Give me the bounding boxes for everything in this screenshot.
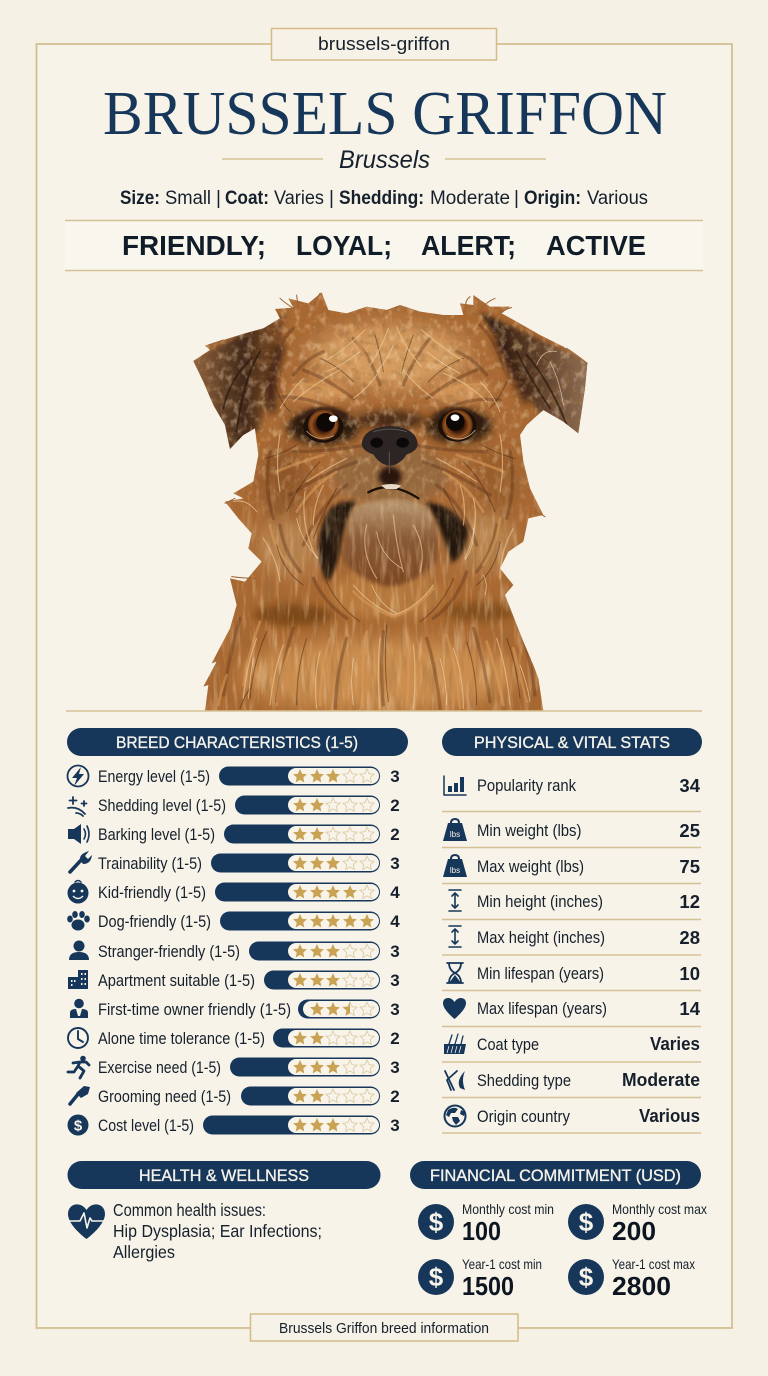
row: popularity rank: [442, 775, 701, 812]
fur strokes dark thin: [240, 335, 520, 708]
row: min lifespan: Min lifespan (years): [477, 965, 604, 983]
heading: financial commitment: FINANCIAL COMMITMENT (USD): [430, 1167, 681, 1185]
soft tones: [310, 325, 470, 388]
row: exercise need: [68, 1056, 400, 1078]
panel: physical and vital stats: [442, 728, 702, 1133]
head base: [252, 308, 528, 593]
icon: buildings: [68, 970, 88, 989]
stat: monthly cost min: [418, 1201, 554, 1246]
row: grooming need: Grooming need (1-5): [98, 1088, 231, 1106]
icon: brush: [70, 1086, 90, 1104]
row: stranger-friendly: Stranger-friendly (1-5): [98, 943, 240, 961]
row: cost level: 3: [390, 1116, 400, 1135]
stat: monthly cost max: $: [579, 1207, 594, 1237]
row: max lifespan: 14: [679, 998, 701, 1019]
row: trainability: Trainability (1-5): [98, 855, 202, 873]
row: grooming need: 2: [390, 1087, 400, 1106]
panel: breed characteristics: [67, 728, 408, 1136]
stat: year-1 cost max: 2800: [612, 1271, 671, 1301]
icon: weight: lbs: [450, 866, 460, 875]
text: common health issues: Hip Dysplasia; Ear Infections;: [113, 1221, 322, 1241]
icon: owner with tie: [70, 999, 88, 1018]
text: common health issues: [113, 1200, 322, 1262]
row: energy level: Energy level (1-5): [98, 768, 210, 786]
top tag: [272, 28, 496, 60]
row: max height: [442, 926, 701, 955]
row: min weight: 25: [679, 820, 700, 841]
meta line: Small: [165, 188, 211, 209]
row: coat type: [442, 1033, 701, 1062]
top tag: brussels-griffon: [318, 33, 450, 54]
nose and mouth: [362, 426, 418, 498]
heading: physical and vital stats: PHYSICAL & VITAL STATS: [474, 734, 670, 752]
icon: height arrows: [449, 890, 461, 911]
text: common health issues: Allergies: [113, 1242, 175, 1262]
icon: heart with pulse: [68, 1204, 105, 1239]
heading: health and wellness: [68, 1161, 380, 1189]
row: kid-friendly: Kid-friendly (1-5): [98, 884, 206, 902]
stat: year-1 cost min: $: [429, 1262, 444, 1292]
meta line: Moderate: [430, 188, 510, 209]
footer tag: [250, 1314, 518, 1341]
row: max weight: Max weight (lbs): [477, 858, 584, 876]
heading: financial commitment: [410, 1161, 701, 1189]
row: kid-friendly: [68, 880, 400, 904]
row: min weight: Min weight (lbs): [477, 822, 582, 840]
row: stranger-friendly: [69, 940, 400, 961]
dog portrait illustration: [180, 285, 600, 712]
row: alone time tolerance: 2: [390, 1029, 400, 1048]
edge spikes: [208, 293, 587, 578]
row: coat type: Coat type: [477, 1036, 539, 1054]
row: popularity rank: 34: [679, 775, 701, 796]
stat: year-1 cost max: Year-1 cost max: [612, 1256, 695, 1272]
row: min weight: [442, 819, 701, 848]
panel: health and wellness: [68, 1161, 380, 1262]
row: max height: 28: [679, 927, 700, 948]
row: cost level: Cost level (1-5): [98, 1117, 194, 1135]
meta line: |: [216, 188, 221, 209]
row: max weight: [442, 855, 701, 884]
row: trainability: 3: [390, 854, 400, 873]
fur streak overlay lower: [206, 477, 543, 710]
fur strokes golden: [218, 322, 527, 708]
meta line: |: [329, 188, 334, 209]
row: stranger-friendly: 3: [390, 942, 400, 961]
row: shedding level: 2: [390, 796, 400, 815]
icon: heart: [443, 998, 466, 1019]
row: min lifespan: 10: [679, 963, 700, 984]
stat: year-1 cost min: [418, 1256, 542, 1301]
icon: shedding hair: [445, 1071, 465, 1090]
icon: clock: [68, 1028, 88, 1048]
stat: year-1 cost max: $: [579, 1262, 594, 1292]
row: min lifespan: [442, 963, 701, 990]
row: apartment suitable: Apartment suitable (1-5): [98, 972, 255, 990]
row: alone time tolerance: Alone time tolerance (1-5): [98, 1030, 265, 1048]
icon: hourglass: [447, 963, 463, 983]
row: max lifespan: [442, 998, 701, 1026]
icon: bar chart: [444, 776, 466, 795]
row: coat type: Varies: [650, 1033, 700, 1054]
row: first-time owner friendly: [70, 999, 400, 1019]
row: energy level: 3: [390, 767, 400, 786]
icon: lightning: [68, 766, 88, 786]
row: shedding level: Shedding level (1-5): [98, 797, 226, 815]
fur strokes light: [243, 327, 513, 708]
icon: coat: [444, 1034, 466, 1054]
row: first-time owner friendly: First-time owner friendly (1-5): [98, 1001, 291, 1019]
temperament band: FRIENDLY;: [122, 230, 266, 261]
meta line: Origin:: [524, 188, 581, 209]
panel: financial commitment: [410, 1161, 707, 1301]
row: max height: Max height (inches): [477, 929, 605, 947]
icon: person: [69, 940, 89, 960]
row: origin country: Various: [639, 1105, 700, 1126]
meta line: Shedding:: [339, 188, 424, 209]
row: barking level: [68, 824, 400, 844]
meta line: Coat:: [225, 188, 269, 209]
row: trainability: [70, 851, 400, 873]
row: first-time owner friendly: 3: [390, 1000, 400, 1019]
row: min height: Min height (inches): [477, 893, 603, 911]
row: dog-friendly: Dog-friendly (1-5): [98, 913, 211, 931]
row: exercise need: 3: [390, 1058, 400, 1077]
meta line: |: [514, 188, 519, 209]
row: dog-friendly: 4: [390, 912, 400, 931]
row: alone time tolerance: [68, 1028, 400, 1048]
icon: dollar: $: [74, 1118, 83, 1134]
beard dark flanks: [318, 501, 357, 582]
meta line: Size:: [120, 188, 160, 209]
brow shadows: [297, 409, 485, 423]
row: min height: 12: [679, 891, 700, 912]
row: kid-friendly: 4: [390, 883, 400, 902]
icon: weight: lbs: [450, 830, 460, 839]
heading: physical and vital stats: [442, 728, 702, 756]
subtitle: Brussels: [339, 146, 430, 174]
temperament band: [65, 220, 703, 270]
right eye: [438, 410, 477, 442]
ear dark streaks: [223, 352, 567, 432]
eye shadows: [287, 410, 360, 445]
row: shedding type: Shedding type: [477, 1072, 571, 1090]
temperament band: LOYAL;: [296, 230, 392, 261]
icon: speaker: [68, 824, 89, 844]
row: apartment suitable: [68, 970, 400, 990]
row: shedding type: [442, 1069, 701, 1098]
row: origin country: Origin country: [477, 1108, 571, 1126]
left eye: [303, 410, 343, 443]
row: max weight: 75: [679, 856, 700, 877]
row: max lifespan: Max lifespan (years): [477, 1000, 607, 1018]
icon: wrench: [70, 851, 92, 872]
stat: monthly cost max: Monthly cost max: [612, 1201, 707, 1217]
stat: monthly cost max: 200: [612, 1216, 656, 1246]
row: shedding level: [68, 796, 400, 816]
row: energy level: [68, 766, 400, 786]
stat: year-1 cost min: 1500: [462, 1271, 514, 1301]
heading: breed characteristics: [67, 728, 408, 756]
dog base rule: [66, 710, 702, 712]
row: barking level: 2: [390, 825, 400, 844]
stat: monthly cost min: 100: [462, 1216, 501, 1246]
icon: shedding sparks: [68, 797, 86, 816]
meta line: Varies: [274, 188, 324, 209]
icon: baby face: [68, 880, 88, 904]
row: barking level: Barking level (1-5): [98, 826, 215, 844]
meta line: Various: [587, 188, 648, 209]
meta line: [120, 188, 648, 209]
row: origin country: [442, 1105, 701, 1133]
left ear: [190, 312, 287, 452]
icon: height arrows: [449, 926, 461, 947]
row: popularity rank: Popularity rank: [477, 777, 577, 795]
row: cost level: [68, 1114, 400, 1136]
row: min height: [442, 890, 701, 920]
beard: [343, 500, 438, 587]
fur strokes pale: [233, 345, 563, 705]
stat: monthly cost min: $: [429, 1207, 444, 1237]
icon: paw: [67, 911, 90, 930]
text: common health issues: Common health issues:: [113, 1200, 266, 1220]
row: shedding type: Moderate: [622, 1069, 700, 1090]
stat: year-1 cost min: Year-1 cost min: [462, 1256, 542, 1272]
title: BRUSSELS GRIFFON: [103, 80, 667, 148]
right ear: [480, 312, 592, 437]
stat: monthly cost min: Monthly cost min: [462, 1201, 554, 1217]
temperament band: ACTIVE: [546, 230, 646, 261]
row: apartment suitable: 3: [390, 971, 400, 990]
fur mottling upper: [196, 293, 586, 537]
stat: monthly cost max: [568, 1201, 707, 1246]
heading: breed characteristics: BREED CHARACTERISTICS (1-5): [116, 734, 358, 752]
icon: runner: [68, 1056, 89, 1078]
footer tag: Brussels Griffon breed information: [279, 1320, 489, 1337]
row: exercise need: Exercise need (1-5): [98, 1059, 221, 1077]
ear roots: [271, 342, 527, 408]
fur clumps dark: [223, 325, 535, 708]
stat: year-1 cost max: [568, 1256, 695, 1301]
icon: weight: [443, 855, 467, 877]
icon: weight: [443, 819, 467, 841]
row: dog-friendly: [67, 911, 400, 931]
heading: health and wellness: HEALTH & WELLNESS: [139, 1167, 309, 1185]
icon: globe: [444, 1106, 466, 1126]
icon: dollar: [68, 1114, 88, 1136]
row: grooming need: [70, 1086, 400, 1106]
temperament band: ALERT;: [421, 230, 516, 261]
